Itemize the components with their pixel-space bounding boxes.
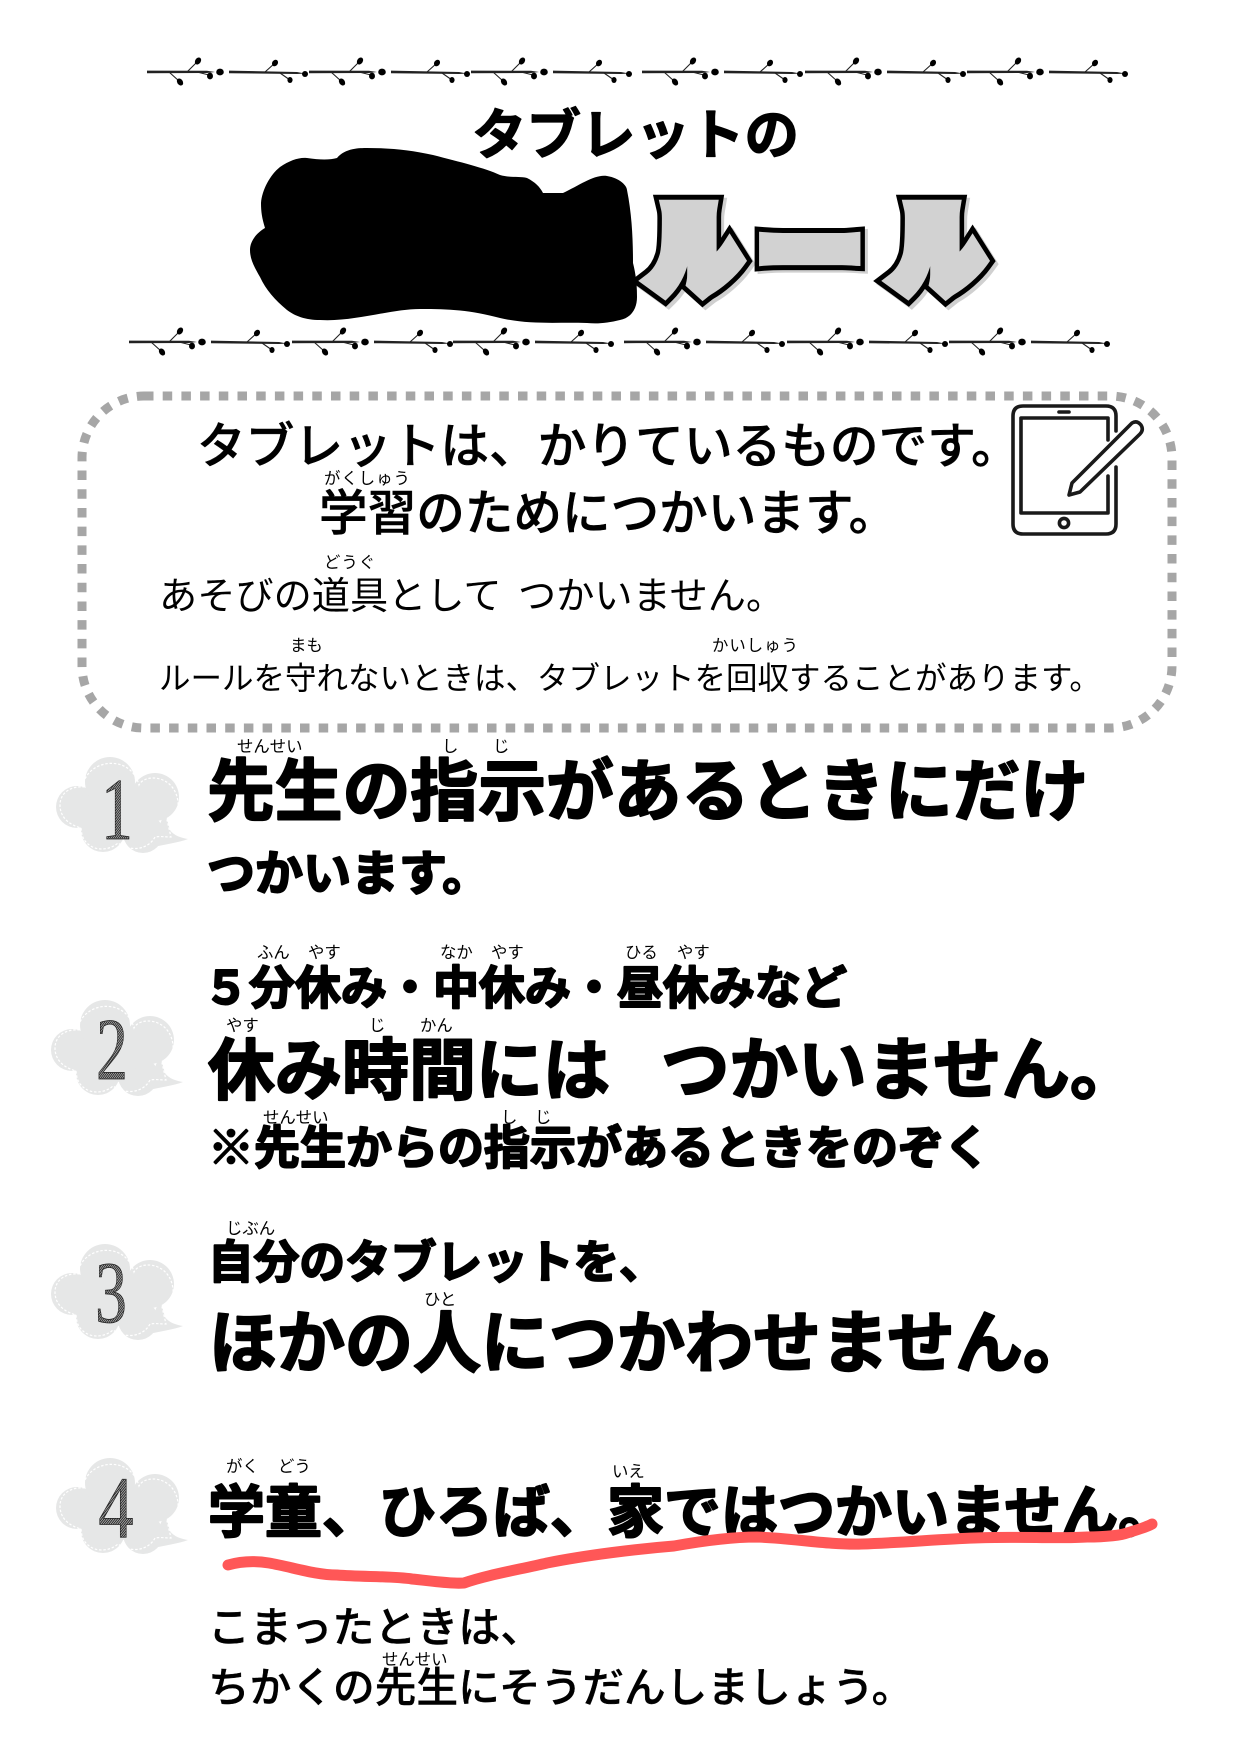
- rule 1 text: [207, 738, 1088, 901]
- rule 2 text: やす: [308, 944, 341, 962]
- badge: cloud 3: [51, 1244, 183, 1342]
- icon: tablet and stylus: [1013, 406, 1142, 534]
- rule 2 text: つかいません。: [661, 1032, 1138, 1109]
- rule 4: [56, 1458, 1175, 1557]
- intro line 4 with furigana: かいしゅう: [712, 637, 799, 655]
- rule 3 text: 自分のタブレットを、: [208, 1237, 665, 1288]
- rule 2 text: ※先生からの指示があるときをのぞく: [208, 1122, 990, 1174]
- badge: cloud 1: [56, 757, 188, 859]
- rule 1: [56, 738, 1088, 901]
- intro line 1: タブレットは、かりているものです。: [197, 420, 1020, 474]
- badge: cloud 2: [51, 1000, 183, 1099]
- rule 2 text: [203, 944, 1138, 1174]
- rule 3 text: ひと: [424, 1291, 456, 1309]
- rule 2 text: じ: [369, 1017, 385, 1035]
- badge: cloud 2: 2: [96, 1001, 128, 1099]
- intro line 3 with furigana: あそびの道具として: [159, 575, 502, 618]
- title: rule lettering: ー: [754, 184, 866, 323]
- title: rule lettering: ル: [649, 195, 740, 307]
- rule 3 text: ほかの人につかわせません。: [209, 1306, 1091, 1382]
- rule 2 text: せんせい: [263, 1109, 329, 1127]
- closing note: せんせい: [382, 1651, 448, 1669]
- rule 3 text: じぶん: [226, 1220, 275, 1238]
- decoration: top vine border: [147, 56, 1128, 87]
- intro line 4 with furigana: ルールを守れないときは、タブレットを回収することがあります。: [159, 660, 1101, 696]
- closing note: [208, 1604, 913, 1711]
- rule 4 text: いえ: [612, 1463, 645, 1481]
- panel: intro notice: [82, 396, 1172, 728]
- rule 2 text: かん: [420, 1017, 453, 1035]
- title: rule lettering: ル: [892, 195, 983, 307]
- rule 1 text: し: [442, 738, 458, 756]
- rule 1 text: せんせい: [237, 738, 303, 756]
- intro line 3 with furigana: [159, 554, 784, 618]
- rule 4 text: がく: [226, 1458, 259, 1476]
- rule 2 text: なか: [440, 944, 473, 962]
- intro line 4 with furigana: まも: [290, 637, 323, 655]
- badge: cloud 1: 1: [101, 761, 133, 859]
- decoration: lower vine border: [129, 326, 1110, 357]
- red hand-drawn underline: [228, 1524, 1152, 1583]
- rule 4 text: 学童、ひろば、家ではつかいません。: [208, 1481, 1175, 1545]
- rule 2 text: 休み時間には: [208, 1034, 610, 1109]
- dashed frame: [82, 396, 1172, 728]
- rule 2: [51, 944, 1138, 1174]
- rule 1 text: つかいます。: [207, 848, 490, 901]
- rule 2 text: ふん: [257, 944, 290, 962]
- rule 2 text: じ: [535, 1109, 551, 1127]
- title: rule lettering: ル: [892, 195, 983, 307]
- intro line 2 with furigana: がくしゅう: [324, 470, 411, 488]
- black redaction blob over title: [250, 148, 637, 323]
- title: rule lettering: ル: [895, 198, 986, 310]
- rule 4 text: どう: [278, 1458, 311, 1476]
- title: rule lettering: [649, 184, 986, 325]
- rule 1 text: 先生の指示があるときにだけ: [207, 755, 1088, 830]
- badge: cloud 3: 3: [95, 1244, 127, 1342]
- intro line 3 with furigana: どうぐ: [324, 554, 376, 572]
- rule 2 text: やす: [677, 944, 710, 962]
- rule 2 text: ひる: [625, 944, 658, 962]
- title: rule lettering: ル: [649, 195, 740, 307]
- badge: cloud 4: 4: [98, 1460, 134, 1557]
- title: tablet line: タブレットの: [472, 105, 799, 166]
- title: rule lettering: ー: [757, 187, 869, 325]
- rule 2 text: し: [501, 1109, 517, 1127]
- intro line 2 with furigana: 学習のためにつかいます。: [319, 487, 897, 541]
- rule 2 text: やす: [226, 1017, 259, 1035]
- closing note: ちかくの先生にそうだんしましょう。: [208, 1664, 913, 1711]
- rule 1 text: じ: [493, 738, 509, 756]
- rule 3 text: [208, 1220, 1091, 1382]
- rule 2 text: ５分休み・中休み・昼休みなど: [203, 962, 847, 1014]
- intro line 3 with furigana: つかいません。: [518, 575, 784, 618]
- intro line 4 with furigana: [159, 637, 1101, 696]
- title: rule lettering: ル: [652, 198, 743, 310]
- rule 2 text: やす: [491, 944, 524, 962]
- closing note: こまったときは、: [208, 1604, 542, 1651]
- title: rule lettering: ー: [754, 184, 866, 323]
- rule 3: [51, 1220, 1091, 1382]
- badge: cloud 4: [56, 1458, 188, 1557]
